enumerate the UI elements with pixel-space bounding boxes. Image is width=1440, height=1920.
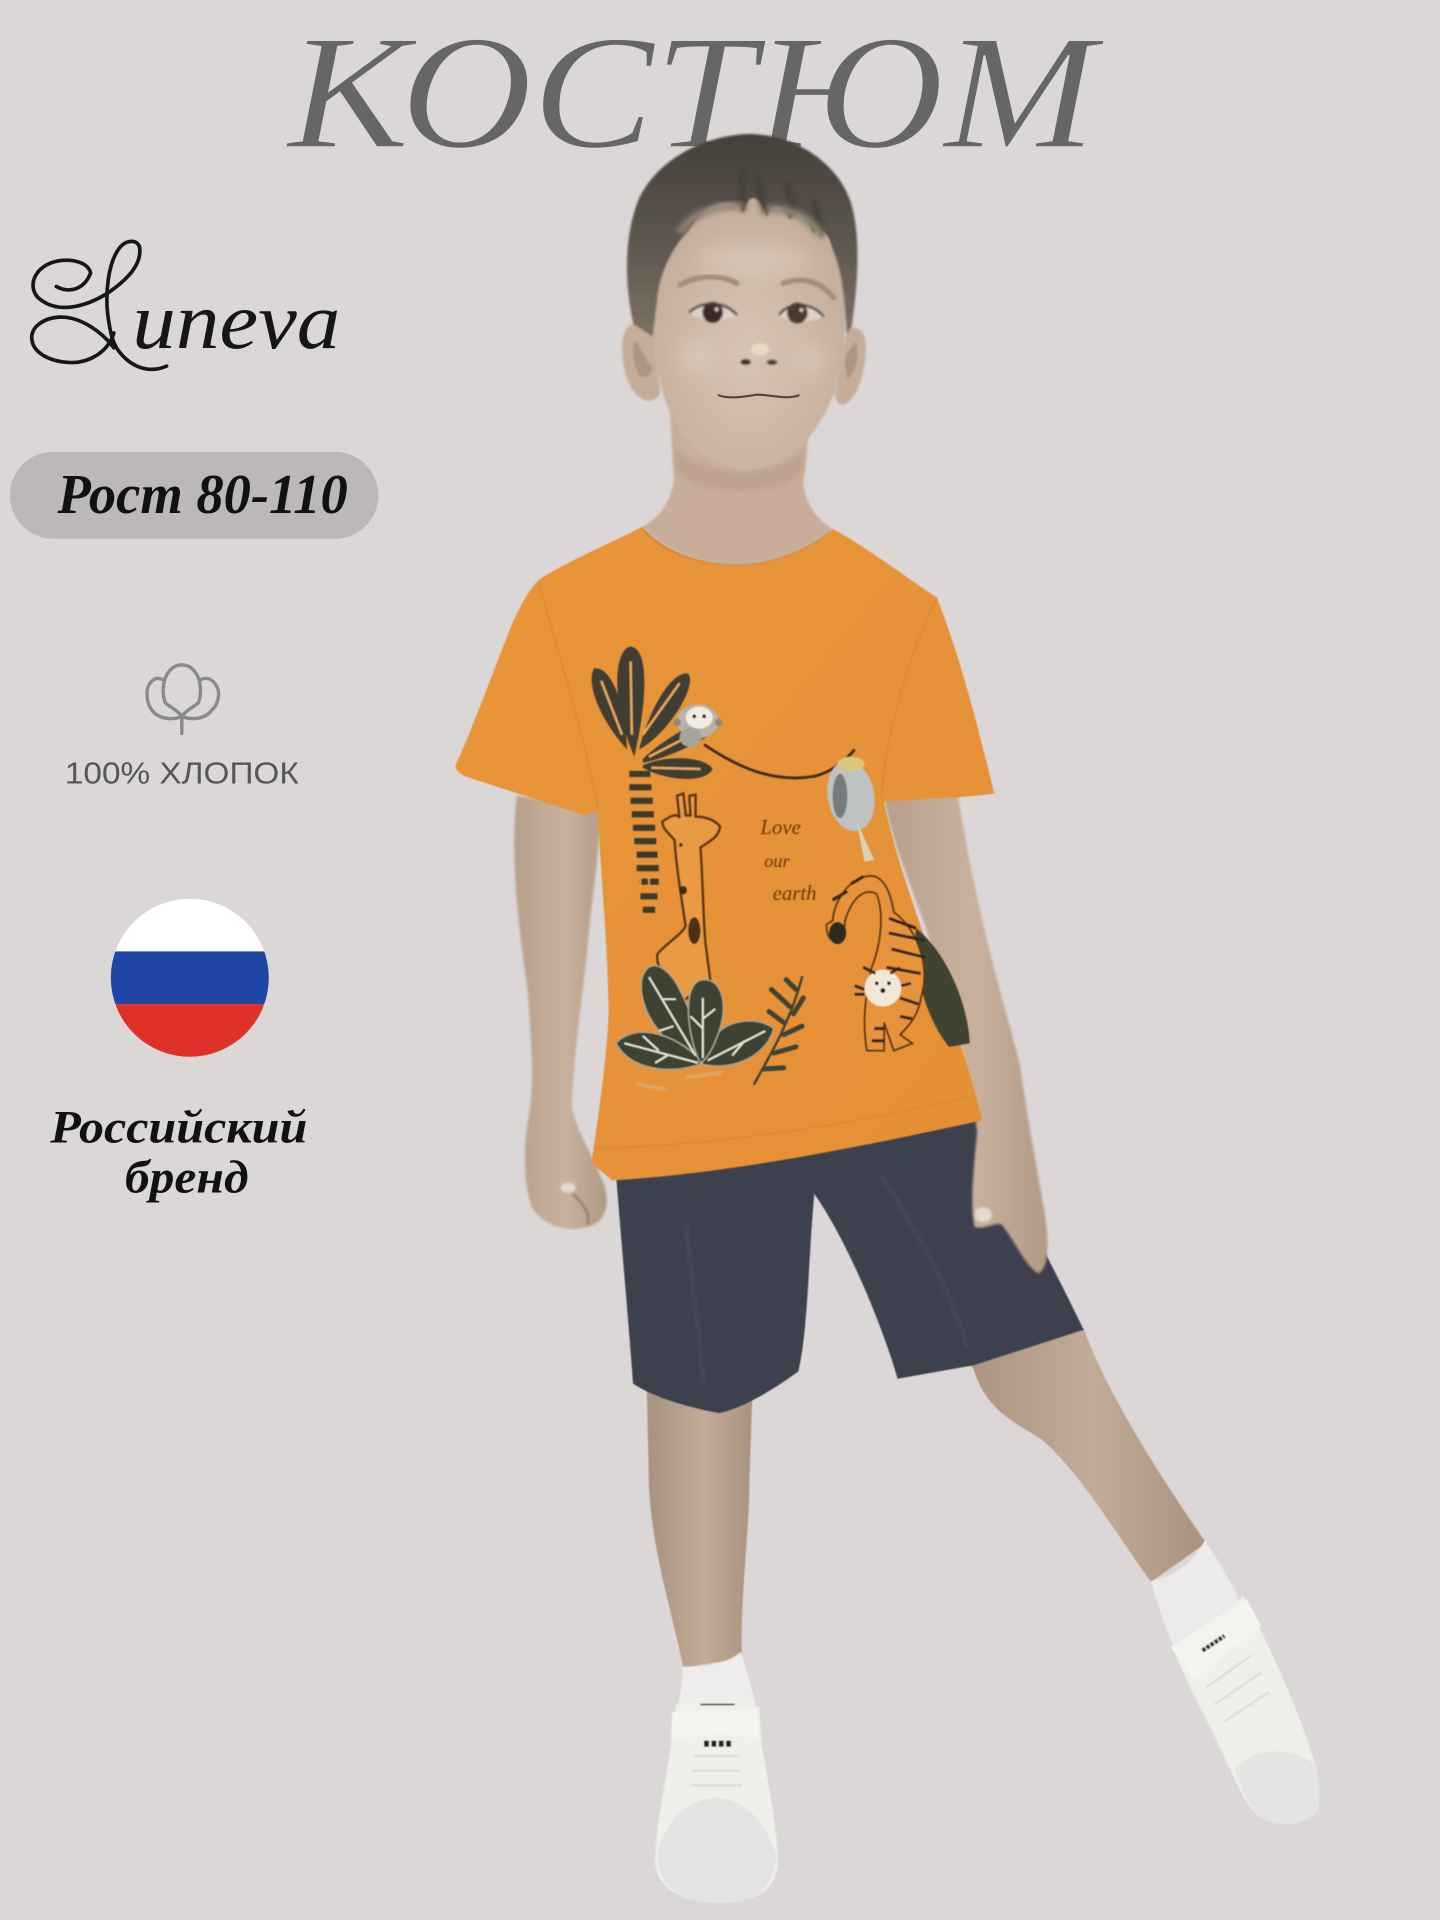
print: bush leaves <box>616 966 774 1069</box>
right arm <box>884 793 1047 1273</box>
left hand nail <box>561 1183 576 1193</box>
right leg <box>955 1310 1206 1582</box>
shirt hem line <box>595 1096 973 1149</box>
hair fringe strands <box>742 170 823 237</box>
shirt sleeve seams <box>539 583 937 808</box>
boy photo illustration <box>456 134 1320 1903</box>
right hand nail <box>975 1207 992 1222</box>
face <box>651 193 846 470</box>
left shoe <box>655 1701 778 1903</box>
print: grey balloon <box>822 757 880 862</box>
left arm <box>514 796 607 1229</box>
hairline softening <box>680 206 820 233</box>
shirt body <box>456 527 994 1180</box>
neck shadow <box>675 448 805 491</box>
brand logo: Luneva <box>32 241 340 369</box>
left eye <box>689 302 737 323</box>
height badge <box>10 452 378 539</box>
title: КОСТЮМ <box>286 3 1105 183</box>
print: love our earth lettering <box>759 815 817 905</box>
print: fern <box>754 977 803 1084</box>
shorts fold highlights <box>686 1176 967 1384</box>
ears <box>622 324 866 405</box>
orange t-shirt <box>456 527 994 1180</box>
logo wordmark: uneva <box>132 277 340 366</box>
shirt print <box>592 647 970 1090</box>
right sock <box>1151 1540 1242 1651</box>
left leg <box>647 1371 753 1668</box>
boy: head <box>622 134 866 565</box>
badge text: Рост 80-110 <box>57 464 348 526</box>
print: giraffe <box>657 793 720 1004</box>
print: monkey <box>673 704 722 747</box>
print: love our earth lettering: our <box>764 851 790 871</box>
icon: russian flag circle <box>110 899 269 1058</box>
logo flourish <box>32 241 167 369</box>
badge pill <box>10 452 378 539</box>
boy: arms <box>514 793 1047 1273</box>
icon: cotton flower <box>147 665 219 733</box>
eyebrows <box>680 277 834 298</box>
shirt neckline shadow <box>643 529 830 565</box>
print: tiger <box>827 876 970 1051</box>
print: love our earth lettering: earth <box>773 881 817 905</box>
nose <box>741 343 777 365</box>
russian brand caption: Российский <box>49 1102 307 1153</box>
shorts <box>616 1117 1084 1413</box>
cotton label: 100% ХЛОПОК <box>65 757 299 791</box>
left sock <box>676 1652 757 1712</box>
neck <box>643 413 833 565</box>
russian brand caption <box>49 1102 307 1204</box>
cheek highlights <box>677 243 827 373</box>
material block: 100% cotton <box>65 665 299 791</box>
russian brand caption: бренд <box>125 1153 249 1204</box>
boy: legs, socks and shoes <box>647 1310 1320 1903</box>
mouth <box>719 395 799 397</box>
print: palm tree <box>592 647 713 910</box>
print: rope <box>704 744 855 778</box>
print: ground smudges <box>637 1073 722 1090</box>
print: love our earth lettering: Love <box>759 815 801 839</box>
left hand finger crease <box>573 1194 588 1224</box>
right shoe <box>1171 1596 1320 1824</box>
hair <box>627 134 857 337</box>
right eye <box>779 303 823 323</box>
